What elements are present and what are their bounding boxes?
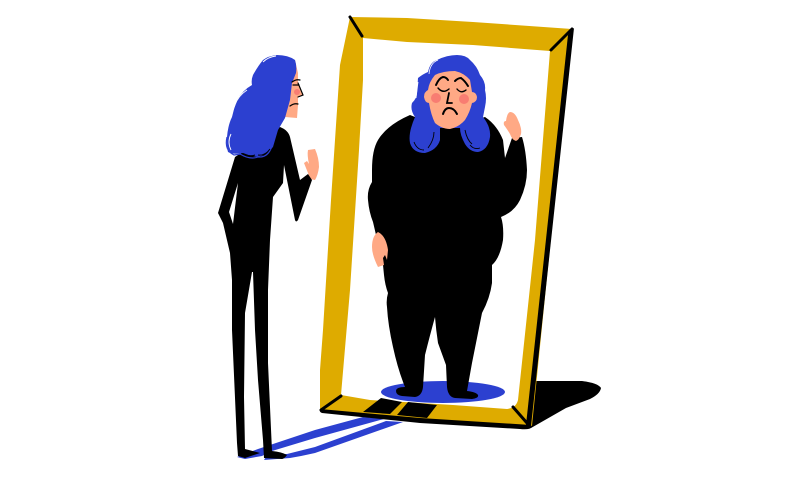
reflection right hand [504, 112, 521, 141]
shadow bands over frame [363, 398, 437, 418]
woman from behind [218, 55, 319, 459]
blue floor reflection [381, 381, 505, 403]
hair curls [243, 149, 270, 156]
face features [290, 80, 303, 106]
mirror floor shadow [524, 381, 601, 428]
reflection cheeks [431, 93, 469, 104]
face pink cheek [294, 89, 300, 95]
arm hand [304, 149, 319, 180]
hair outlines [226, 137, 272, 158]
reflection left hand [372, 232, 388, 267]
hair highlights [229, 56, 276, 150]
neck and face [283, 58, 303, 118]
hair [227, 55, 296, 157]
reflection face [424, 71, 477, 129]
reflected woman [368, 55, 527, 399]
blue leg shadows [237, 417, 403, 460]
reflection hair [410, 55, 490, 153]
reflection facial features [436, 77, 468, 114]
mirror frame [320, 17, 574, 429]
reflection hair curls [414, 130, 480, 150]
reflection hair strands [416, 60, 438, 98]
reflection body [368, 115, 527, 399]
body and legs [218, 127, 312, 459]
